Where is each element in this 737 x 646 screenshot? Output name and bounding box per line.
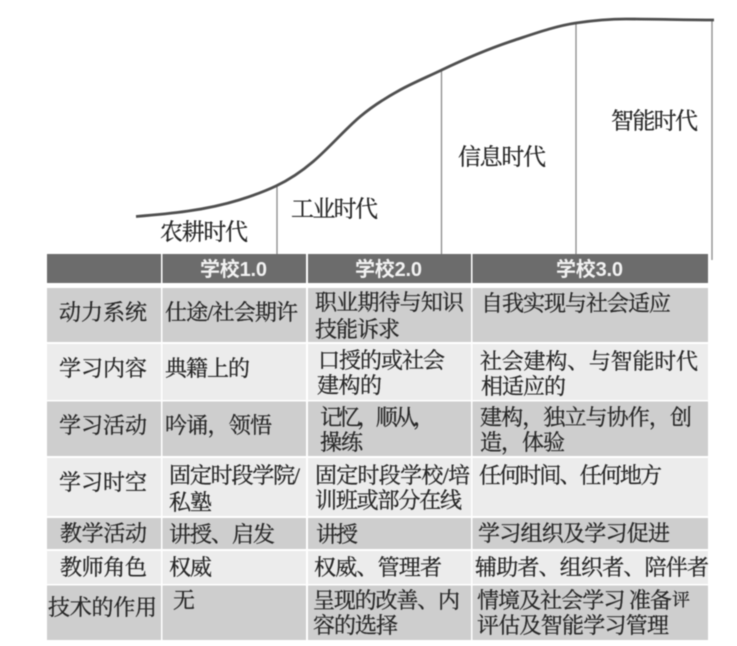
row: teacher role: 权威 [169, 555, 212, 580]
header row: 学校3.0 [556, 257, 623, 281]
row: teaching activities: 讲授 [316, 522, 358, 547]
row: role of technology: 无 [173, 588, 195, 613]
row: role of technology: 容的选择 [313, 613, 398, 638]
row: role of technology: 呈现的改善、内 [313, 588, 460, 613]
row: learning activities: 吟诵，领悟 [165, 413, 272, 439]
row: motivation system: 动力系统 [59, 300, 147, 325]
row: learning time and space [47, 458, 708, 516]
row: role of technology: 评估及智能学习管理 [477, 613, 669, 638]
row: learning content: 社会建构、与智能时代 [480, 349, 698, 374]
row: learning time and space: 固定时段学校/培 [315, 463, 470, 488]
row: learning content: 相适应的 [481, 374, 566, 399]
era divider lines [277, 20, 712, 260]
row: motivation system: 职业期待与知识 [315, 290, 465, 315]
row: motivation system: 技能诉求 [315, 317, 400, 342]
row: teaching activities: 教学活动 [60, 521, 147, 546]
row: teacher role: 辅助者、组织者、陪伴者 [475, 555, 709, 580]
row: teacher role: 权威、管理者 [314, 555, 442, 580]
table: school generations compared [47, 254, 709, 640]
row: motivation system [47, 288, 708, 342]
row: learning content: 建构的 [317, 373, 382, 398]
row: role of technology: 评 [672, 590, 690, 610]
row: learning time and space: 训班或部分在线 [315, 488, 462, 513]
row: role of technology: 技术的作用 [48, 595, 157, 620]
label: information era: 信息时代 [458, 144, 546, 170]
row: teacher role [47, 551, 709, 584]
row: learning content: 口授的或社会 [318, 348, 445, 373]
label: agricultural era: 农耕时代 [160, 220, 248, 244]
row: learning content: 学习内容 [59, 356, 147, 381]
row: teaching activities: 学习组织及学习促进 [478, 521, 670, 546]
row: learning activities: 学习活动 [59, 413, 147, 438]
header row [47, 254, 708, 283]
row: learning time and space: 任何时间、任何地方 [479, 463, 662, 488]
row: learning activities: 造，体验 [480, 430, 565, 456]
header row: 学校2.0 [355, 257, 422, 281]
row: learning activities: 操练 [320, 430, 364, 455]
row: motivation system: 自我实现与社会适应 [481, 291, 671, 316]
row: learning time and space: 固定时段学院/ [169, 463, 301, 488]
row: learning activities: 建构，独立与协作，创 [480, 405, 692, 431]
row: motivation system: 仕途/社会期许 [165, 300, 298, 325]
row: learning time and space: 学习时空 [59, 470, 147, 495]
row: teaching activities: 讲授、启发 [169, 522, 275, 547]
row: role of technology [47, 586, 708, 640]
row: learning time and space: 私塾 [169, 490, 212, 515]
S-curve [136, 19, 714, 216]
row: learning activities [47, 402, 708, 456]
chart: era growth curve [136, 19, 714, 260]
row: learning activities: 记忆，顺从， [320, 405, 435, 431]
label: industrial era: 工业时代 [291, 196, 378, 222]
row: role of technology: 情境及社会学习 准备 [477, 588, 672, 613]
row: learning content [47, 344, 708, 400]
header row: 学校1.0 [200, 257, 267, 281]
row: teaching activities [47, 518, 708, 549]
row: learning content: 典籍上的 [165, 356, 250, 381]
row: teacher role: 教师角色 [60, 555, 147, 580]
label: intelligent era: 智能时代 [611, 108, 698, 134]
